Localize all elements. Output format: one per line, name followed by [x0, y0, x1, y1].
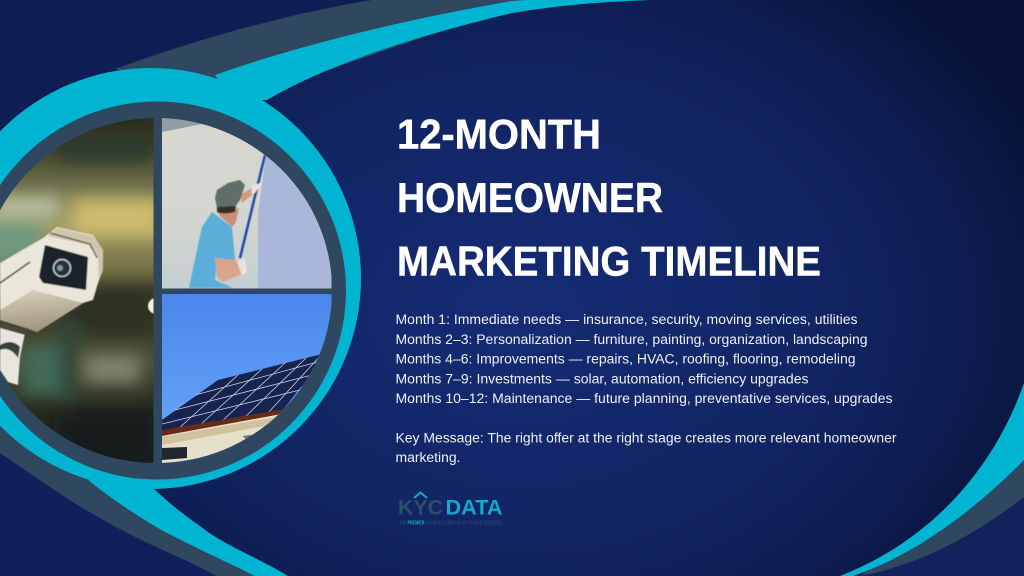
neck — [217, 208, 239, 227]
camera body — [0, 227, 103, 385]
cap — [215, 180, 245, 208]
title: 12-MONTH — [397, 110, 601, 158]
swoosh: bottom right cyan — [840, 383, 1024, 576]
roller pole — [240, 155, 265, 258]
timeline text: Months 7–9: Investments — solar, automation, efficiency upgrades — [396, 372, 809, 386]
timeline text: Month 1: Immediate needs — insurance, security, moving services, utilities — [396, 312, 858, 327]
swoosh: bottom right grey — [860, 455, 1024, 576]
timeline text: Months 2–3: Personalization — furniture, painting, organization, landscaping — [396, 332, 868, 347]
photo: solar roof — [162, 294, 340, 470]
photo: security camera — [0, 118, 154, 463]
swoosh: top cyan — [215, 0, 650, 100]
timeline text: Months 10–12: Maintenance — future planning, preventative services, upgrades — [396, 391, 893, 406]
logo: KYC Data: DATA — [446, 496, 502, 520]
title: MARKETING TIMELINE — [397, 238, 821, 284]
logo: KYC Data — [398, 492, 502, 526]
key message — [396, 430, 897, 465]
logo: KYC Data: THE PREMIER SOURCE COMPILER OF PUBLIC RECORDS — [399, 520, 502, 526]
photo collage — [0, 110, 340, 470]
timeline text: Months 4–6: Improvements — repairs, HVAC, roofing, flooring, remodeling — [396, 352, 856, 366]
title: HOMEOWNER — [397, 174, 663, 221]
logo: KYC Data: KYC — [398, 496, 443, 520]
circle frame: outer cyan ring — [0, 68, 361, 489]
swoosh: bottom cyan — [88, 480, 288, 576]
circle frame: inner slate ring — [0, 102, 346, 480]
photo: painter at wall — [162, 110, 332, 289]
swoosh: top grey — [115, 0, 530, 90]
key message: Key Message: The right offer at the right stage creates more relevant homeowner — [396, 430, 897, 446]
timeline text — [396, 312, 893, 406]
arm upper — [240, 188, 252, 203]
shirt — [189, 212, 235, 288]
swoosh: bottom grey — [0, 400, 262, 576]
arm lower — [215, 258, 242, 282]
title — [397, 110, 821, 284]
key message: marketing. — [396, 450, 460, 465]
